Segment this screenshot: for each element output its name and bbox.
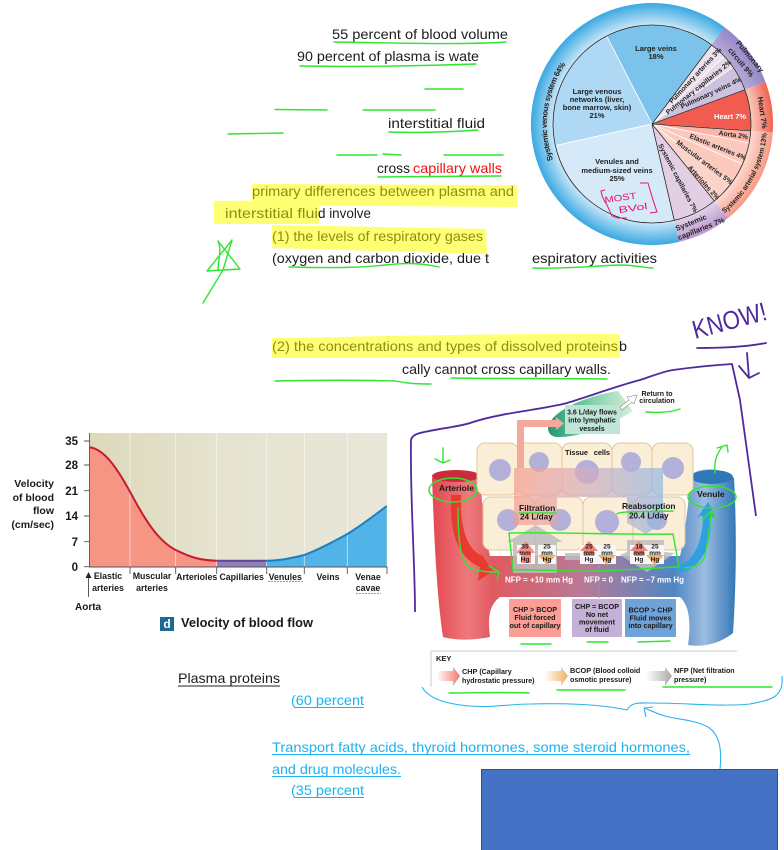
- key legend: hydrostatic pressure): [462, 677, 535, 685]
- outcome box: fluid moves in: BCOP > CHP: [628, 606, 673, 614]
- chart curve: [89, 447, 387, 561]
- key legend: [431, 651, 737, 687]
- tissue and vessel labels: Venule: [697, 489, 725, 499]
- pie labels: Systemic arterial system 13%: [722, 133, 767, 213]
- pie labels: medium-sized veins: [581, 166, 653, 175]
- outcome box: fluid forced out: Fluid forced: [514, 613, 556, 622]
- pressure values: mm: [649, 550, 661, 557]
- tissue and vessel labels: 24 L/day: [520, 512, 553, 522]
- pie inner wedges: [553, 25, 751, 223]
- chart y axis title: flow: [33, 505, 55, 517]
- outcome box: fluid moves in: into capillary: [628, 621, 673, 630]
- chart x axis labels: Elastic: [94, 571, 122, 581]
- vessel: arteriole to venule: [432, 469, 736, 646]
- notes: blood plasma text block: capillary walls: [413, 160, 502, 176]
- notes: blood plasma text block: (1) the levels of respiratory gases: [272, 228, 483, 244]
- pressure values: mm: [519, 550, 531, 557]
- outcome box: no net movement: No net: [586, 610, 609, 619]
- blue rectangle cover: [482, 770, 778, 850]
- chart caption: d: [163, 617, 171, 631]
- pie labels: networks (liver,: [570, 95, 624, 104]
- grey net filtration arrows: [507, 525, 675, 573]
- pie labels: Muscular arteries 5%: [675, 140, 733, 186]
- notes: highlighter marks: [214, 184, 620, 358]
- pressure values: Hg: [521, 556, 529, 564]
- chart area: veins: [267, 506, 387, 567]
- pressure values: 25: [543, 544, 551, 550]
- tissue and vessel labels: [439, 448, 725, 522]
- lymph label box: [565, 405, 620, 434]
- notes: blood plasma text block: (oxygen and carbon dioxide, due t: [272, 250, 489, 266]
- chart x axis labels: Venules: [269, 572, 302, 582]
- chart y axis numbers: 28: [65, 460, 79, 472]
- chart: velocity of blood flow: [11, 433, 388, 631]
- notes: green underlines: [228, 42, 653, 384]
- chart y axis numbers: 0: [72, 562, 78, 574]
- pressure values: Hg: [585, 556, 593, 564]
- key legend: osmotic pressure): [570, 676, 632, 684]
- outcome box: no net movement: CHP = BCOP: [575, 602, 619, 611]
- notes: blood plasma text block: interstitial fluid: [388, 115, 485, 131]
- handwritten note: most blood volume: MOST: [604, 191, 638, 205]
- chart x axis labels: Muscular: [133, 571, 172, 581]
- tissue and vessel labels: Tissue cells: [565, 448, 610, 457]
- chart x axis labels: [92, 571, 381, 593]
- pie chart: blood volume distribution: [530, 3, 773, 245]
- chart x axis labels: Arterioles: [176, 572, 217, 582]
- pie labels: bone marrow, skin): [563, 103, 632, 112]
- chart area: arteries: [89, 447, 217, 567]
- outcome box: fluid moves in: [625, 599, 676, 637]
- blue arrow pointing to key: [644, 707, 721, 769]
- notes: blood plasma text block: cally cannot cross capillary walls.: [402, 361, 611, 377]
- pie labels: Heart 7%: [714, 112, 746, 121]
- chart y axis title: [11, 478, 55, 531]
- chart area: capillaries: [217, 561, 267, 567]
- lymph label box: vessels: [579, 426, 605, 433]
- notes: blood plasma text block: 55 percent of blood volume: [332, 26, 508, 42]
- tissue and vessel labels: Filtration: [519, 503, 555, 513]
- handwritten note: most blood volume: [601, 183, 657, 218]
- pie labels: Systemic venous system 64%: [542, 62, 566, 161]
- key legend: pressure): [674, 676, 707, 684]
- outcome box: fluid forced out: out of capillary: [509, 621, 561, 630]
- notes: blood plasma text block: (2) the concentrations and types of dissolved proteins: [272, 338, 618, 354]
- pressure values: [516, 541, 664, 565]
- pie labels: 18%: [648, 52, 664, 61]
- pressure values: Hg: [651, 556, 659, 564]
- tissue and vessel labels: Arteriole: [439, 483, 474, 493]
- pressure values: Hg: [543, 556, 551, 564]
- pie black outlines: [553, 25, 751, 223]
- net filtration pressure labels: NFP = 0: [584, 576, 614, 584]
- pie labels: Elastic arteries 4%: [688, 133, 747, 162]
- key legend: KEY: [436, 654, 451, 663]
- chart x axis labels: arteries: [136, 583, 168, 593]
- notes: plasma proteins text block: [178, 670, 690, 798]
- pressure values: 18: [635, 544, 643, 550]
- chart x axis labels: cavae: [356, 583, 380, 593]
- aorta arrow and label: Aorta: [75, 602, 102, 613]
- blood flow arrows: [451, 495, 716, 581]
- chart y axis title: of blood: [13, 492, 54, 504]
- outcome box: fluid forced out: CHP > BCOP: [513, 605, 557, 614]
- chart y axis numbers: 14: [65, 511, 79, 523]
- notes: blood plasma text block: 90 percent of plasma is wate: [297, 48, 479, 64]
- notes: plasma proteins text block: (35 percent: [291, 782, 364, 798]
- pie labels: 21%: [589, 111, 605, 120]
- pie labels: Pulmonary arteries 3%: [668, 47, 723, 105]
- purple hand-drawn outline around capillary figure: [411, 364, 756, 612]
- diagram: capillary exchange: [429, 391, 772, 693]
- pressure values: mm: [541, 550, 553, 557]
- key legend: BCOP (Blood colloid: [570, 666, 640, 675]
- notes: blood plasma text block: primary differences between plasma and: [252, 183, 514, 199]
- notes: plasma proteins text block: and drug molecules.: [272, 761, 401, 777]
- outcome box: fluid forced out: [509, 599, 561, 637]
- outcome box: no net movement: [572, 599, 622, 637]
- pie labels: Pulmonary: [734, 39, 766, 75]
- pie labels: Pulmonary capillaries 2%: [665, 59, 733, 116]
- pie labels: Pulmonary veins 4%: [680, 76, 743, 111]
- handwritten KNOW note with arrow: [689, 296, 770, 378]
- pressure values: 25: [585, 544, 593, 550]
- pie labels: capillaries 7%: [676, 215, 726, 242]
- chart y axis numbers: 35: [65, 436, 79, 448]
- pressure values: mm: [583, 550, 595, 557]
- notes: blood plasma text block: espiratory activities: [532, 250, 657, 266]
- pressure values: 25: [603, 544, 611, 550]
- pressure values: mm: [601, 550, 613, 557]
- key legend: NFP (Net filtration: [674, 666, 735, 675]
- chart plot background: [90, 433, 387, 567]
- outcome box: no net movement: of fluid: [585, 625, 609, 634]
- notes: blood plasma text block: cross: [377, 160, 410, 176]
- chart x axis labels: Veins: [317, 572, 340, 582]
- notes: blood plasma text block: b: [619, 338, 627, 354]
- notes: blood plasma text block: d involve: [318, 205, 371, 221]
- pie labels: Arterioles 2%: [686, 165, 720, 201]
- chart y axis title: Velocity: [14, 478, 54, 490]
- tissue and vessel labels: 20.4 L/day: [629, 512, 669, 520]
- chart x axis labels: arteries: [92, 583, 124, 593]
- key legend: CHP (Capillary: [462, 667, 512, 676]
- pressure values: mm: [633, 550, 645, 557]
- pie labels: Venules and: [595, 157, 639, 166]
- pie labels: 25%: [609, 174, 625, 183]
- pie labels: Heart 7%: [756, 96, 769, 129]
- pressure values: 35: [521, 544, 529, 550]
- aorta arrow and label: [75, 572, 102, 613]
- filtration and reabsorption flow arrows: [514, 468, 663, 534]
- net filtration pressure labels: [505, 576, 684, 584]
- pie labels: Large veins: [635, 44, 677, 53]
- notes: blood plasma text block: interstitial flui: [225, 205, 318, 221]
- return to circulation arrow and label: Return to: [641, 391, 673, 398]
- blue bracket under key: [422, 676, 782, 710]
- pressure values: Hg: [635, 556, 643, 564]
- pie labels: Large venous: [573, 87, 621, 96]
- handwritten note: most blood volume: BVol: [618, 201, 648, 215]
- net filtration pressure labels: NFP = +10 mm Hg: [505, 576, 573, 584]
- net filtration pressure labels: NFP = −7 mm Hg: [621, 576, 684, 584]
- pressure values: 25: [651, 544, 659, 550]
- tissue and vessel labels: Reabsorption: [622, 501, 675, 511]
- handwritten KNOW note with arrow: KNOW!: [689, 296, 770, 345]
- icon: green hand-drawn star: [203, 240, 240, 303]
- lymphatic vessel: [548, 391, 633, 437]
- outcome box: no net movement: movement: [579, 618, 616, 626]
- tissue cells: [477, 443, 693, 550]
- return to circulation arrow and label: circulation: [639, 398, 675, 405]
- chart y axis numbers: 21: [65, 486, 79, 498]
- pie outer ring: [531, 3, 773, 245]
- pressure values: Hg: [603, 556, 611, 564]
- lymph label box: 3.6 L/day flows: [567, 410, 617, 416]
- pie labels: circuit 9%: [726, 46, 756, 79]
- chart x axis labels: Venae: [355, 572, 381, 582]
- return to circulation arrow and label: [620, 391, 675, 410]
- notes: blood plasma text block: [225, 26, 657, 377]
- pie labels: Systemic capillaries 7%: [656, 143, 698, 214]
- chart x axis labels: Capillaries: [219, 572, 264, 582]
- lymph label box: into lymphatic: [568, 418, 616, 424]
- outcome box: fluid moves in: Fluid moves: [630, 614, 671, 622]
- chart y axis title: (cm/sec): [11, 519, 54, 531]
- notes: plasma proteins text block: Plasma proteins: [178, 670, 280, 686]
- green annotations on diagram: [429, 409, 772, 693]
- pie labels: Systemic: [674, 212, 708, 233]
- chart y axis numbers: 7: [72, 537, 78, 549]
- notes: plasma proteins text block: (60 percent: [291, 692, 364, 708]
- chart caption: Velocity of blood flow: [181, 616, 313, 630]
- lymph flow pipe: [517, 417, 564, 468]
- notes: plasma proteins text block: Transport fatty acids, thyroid hormones, some steroid hormones,: [272, 739, 690, 755]
- pie labels: [542, 39, 769, 242]
- chart y axis numbers: [65, 436, 79, 574]
- pie labels: Aorta 2%: [718, 130, 748, 141]
